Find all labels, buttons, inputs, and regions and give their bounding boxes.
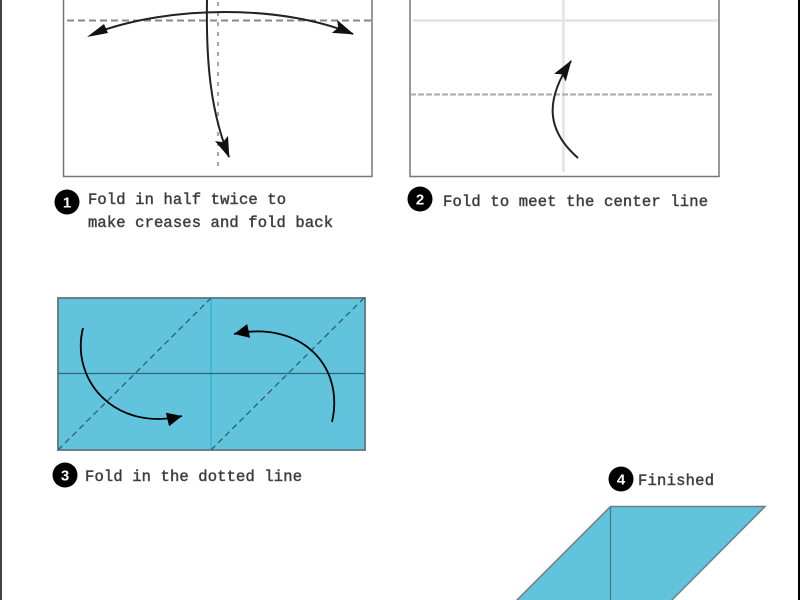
arrow: right fold	[234, 331, 334, 422]
caption: step 4	[608, 466, 714, 492]
caption text 1: Fold in half twice to	[88, 191, 286, 209]
arrow: fold to center	[553, 61, 578, 158]
number badge 2: 2	[416, 192, 424, 208]
arrow: horizontal fold	[98, 12, 353, 34]
caption text 1: make creases and fold back	[88, 214, 333, 232]
number badge 2	[408, 186, 432, 212]
caption text 4: Finished	[638, 472, 714, 490]
arrow: start head	[87, 24, 108, 37]
caption text 3: Fold in the dotted line	[85, 468, 302, 486]
caption: step 3	[52, 462, 302, 488]
caption text 2: Fold to meet the center line	[443, 193, 708, 211]
number badge 4: 4	[617, 472, 626, 488]
caption: step 1	[54, 190, 333, 232]
number badge 3: 3	[61, 468, 69, 484]
number badge 1: 1	[63, 194, 71, 212]
caption: step 2	[408, 186, 708, 212]
caption text 1	[88, 191, 333, 232]
number badge 3	[52, 462, 78, 488]
arrow: left fold	[81, 328, 182, 419]
panel: finished model	[501, 506, 765, 600]
number badge 1	[54, 190, 80, 214]
panel: step 3	[58, 298, 365, 450]
panel: step 2	[410, 0, 719, 176]
panel: step 1	[64, 0, 372, 176]
arrow: vertical fold	[207, 0, 229, 157]
